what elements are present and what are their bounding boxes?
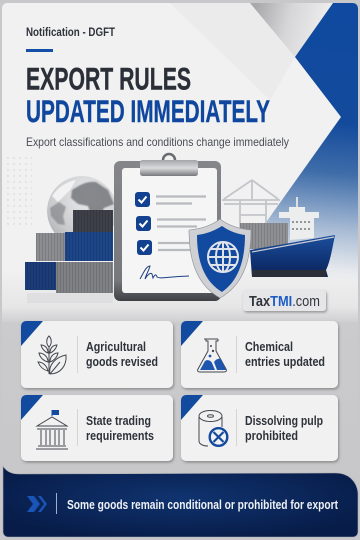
footer banner — [3, 466, 358, 537]
divider — [77, 336, 78, 373]
label: Agricultural — [86, 340, 146, 354]
card: chemical entries — [181, 321, 338, 388]
background panel — [2, 3, 358, 322]
card corner — [181, 321, 203, 346]
accent rule — [26, 49, 53, 52]
icon: government building — [36, 410, 68, 449]
label: prohibited — [245, 429, 298, 443]
label — [245, 340, 325, 369]
icon: flask — [198, 339, 226, 372]
label — [86, 340, 158, 369]
title — [26, 60, 270, 129]
divider — [77, 409, 78, 446]
divider — [236, 336, 237, 373]
checklist — [135, 192, 206, 255]
label — [86, 414, 154, 443]
label: requirements — [86, 429, 154, 443]
icon: pulp roll prohibited — [199, 410, 227, 446]
illustration: port crane — [222, 180, 280, 238]
illustration: cargo ship — [240, 197, 335, 277]
illustration: containers — [25, 210, 113, 303]
card: agricultural goods — [21, 321, 173, 388]
card corner — [21, 395, 43, 420]
card: dissolving pulp — [181, 395, 338, 461]
eyebrow: Notification - DGFT: Notification - DGFT — [26, 27, 115, 39]
clipboard clip — [140, 154, 198, 176]
label: entries updated — [245, 355, 325, 369]
label — [245, 414, 323, 443]
illustration: clipboard — [114, 154, 221, 301]
illustration: globe — [47, 176, 114, 233]
logo badge: TaxTMI.com: TaxTMI.com — [249, 293, 320, 310]
divider — [56, 493, 57, 514]
signature — [140, 266, 189, 279]
card corner — [181, 395, 203, 420]
icon: wheat and leaf — [38, 336, 66, 374]
icon: globe shield — [189, 219, 251, 298]
card: state trading — [21, 395, 173, 461]
icon: double chevron — [27, 496, 47, 512]
title: EXPORT RULES — [26, 60, 191, 96]
divider — [236, 409, 237, 446]
label: Dissolving pulp — [245, 414, 323, 428]
label: goods revised — [86, 355, 158, 369]
label: Chemical — [245, 340, 293, 354]
label: State trading — [86, 414, 151, 428]
subtitle: Export classifications and conditions change immediately — [26, 135, 289, 149]
card corner — [21, 321, 43, 346]
